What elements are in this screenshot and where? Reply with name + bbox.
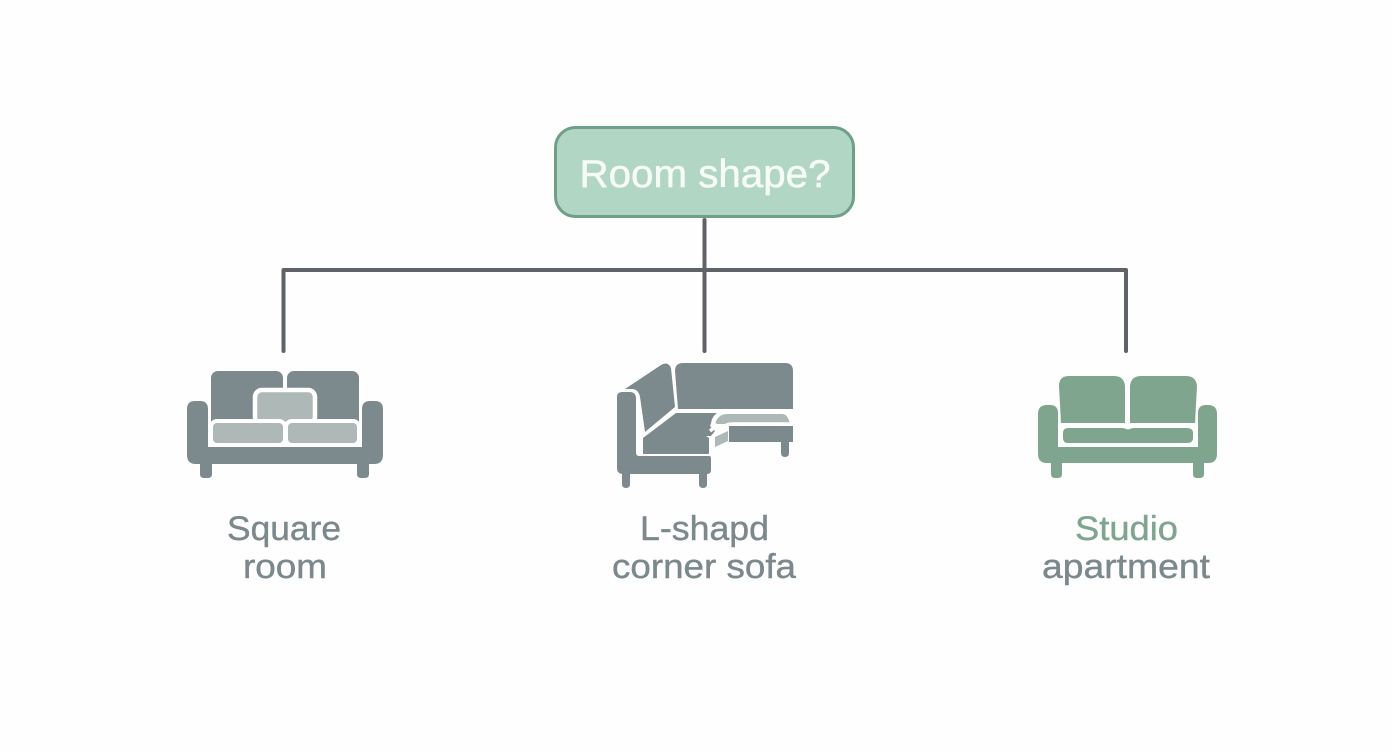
icon: square room sofa — [187, 371, 383, 478]
label: Square room: Square — [227, 510, 341, 548]
question box: Room shape?: Room shape? — [580, 153, 830, 196]
label: Studio apartment: apartment — [1042, 548, 1211, 586]
label: Studio apartment — [1042, 510, 1211, 586]
icon: studio apartment sofa — [1038, 376, 1217, 478]
question box: Room shape? — [556, 128, 854, 216]
label: Square room — [227, 510, 341, 586]
label: Square room: room — [243, 548, 327, 586]
icon: L-shaped corner sofa — [617, 363, 794, 488]
label: L-shapd corner sofa: L-shapd — [640, 510, 769, 548]
connector lines — [284, 220, 1126, 351]
label: Studio apartment: Studio — [1075, 510, 1178, 548]
label: L-shapd corner sofa — [612, 510, 796, 586]
label: L-shapd corner sofa: corner sofa — [612, 548, 796, 586]
